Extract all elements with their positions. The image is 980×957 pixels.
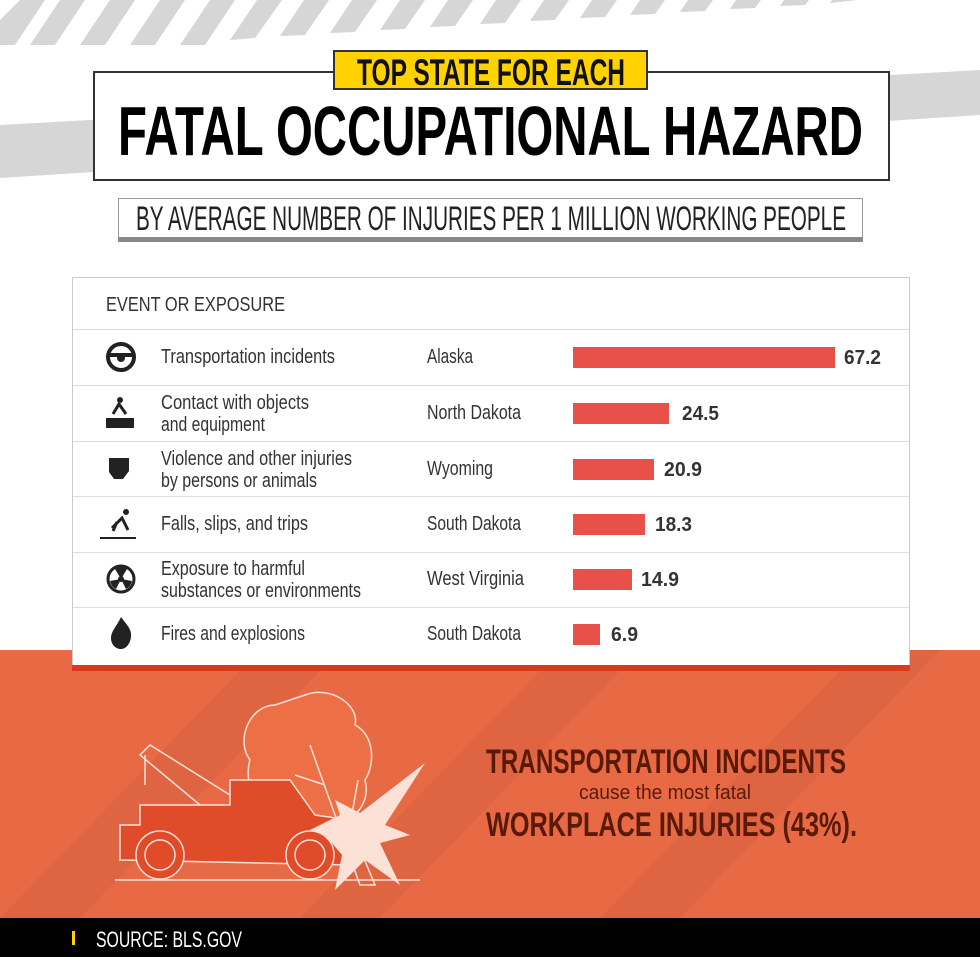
- row: falls: Falls, slips, and trips: [161, 513, 308, 535]
- title box: [93, 71, 890, 181]
- row: exposure: [108, 558, 679, 602]
- row: fires: Fires and explosions: [161, 623, 305, 645]
- row: violence: Violence and other injuries: [161, 448, 352, 470]
- row: falls: South Dakota: [427, 513, 522, 535]
- row: transportation: 67.2: [844, 347, 881, 369]
- row: violence: Wyoming: [427, 458, 493, 480]
- row: contact: 24.5: [682, 403, 719, 425]
- row: violence: [109, 448, 702, 492]
- icon: steering wheel: [108, 344, 134, 370]
- row: contact: Contact with objects: [161, 392, 309, 414]
- table header: EVENT OR EXPOSURE: [106, 294, 285, 316]
- icon: radiation: [108, 566, 134, 592]
- icon: fist: [109, 458, 129, 479]
- row: contact: North Dakota: [427, 402, 522, 424]
- callout text: cause the most fatal: [579, 782, 751, 804]
- row: transportation: Alaska: [427, 346, 474, 368]
- row: fires: 6.9: [611, 624, 638, 646]
- callout text: [486, 743, 857, 844]
- row: exposure: 14.9: [641, 569, 679, 591]
- background stripes: [0, 0, 980, 178]
- footer source: SOURCE: BLS.GOV: [96, 927, 242, 952]
- row: violence: 20.9: [664, 459, 702, 481]
- row: exposure: substances or environments: [161, 580, 361, 602]
- icon: falling person: [100, 509, 136, 539]
- row: exposure: Exposure to harmful: [161, 558, 305, 580]
- row: fires: South Dakota: [427, 623, 522, 645]
- illustration: tow truck hitting tree: [115, 692, 425, 890]
- icon: worker: [106, 397, 134, 428]
- icon: flame: [111, 617, 131, 649]
- row: falls: 18.3: [655, 514, 692, 536]
- row: contact: and equipment: [161, 414, 265, 436]
- footer source: [0, 918, 980, 957]
- row: transportation: Transportation incidents: [161, 346, 335, 368]
- table panel: [72, 277, 910, 671]
- row: violence: by persons or animals: [161, 470, 317, 492]
- row: fires: [111, 617, 638, 649]
- orange section: [0, 650, 980, 918]
- row: transportation: [108, 344, 881, 370]
- row: falls: [100, 509, 692, 539]
- row: contact: [106, 392, 719, 436]
- row: exposure: West Virginia: [427, 568, 525, 590]
